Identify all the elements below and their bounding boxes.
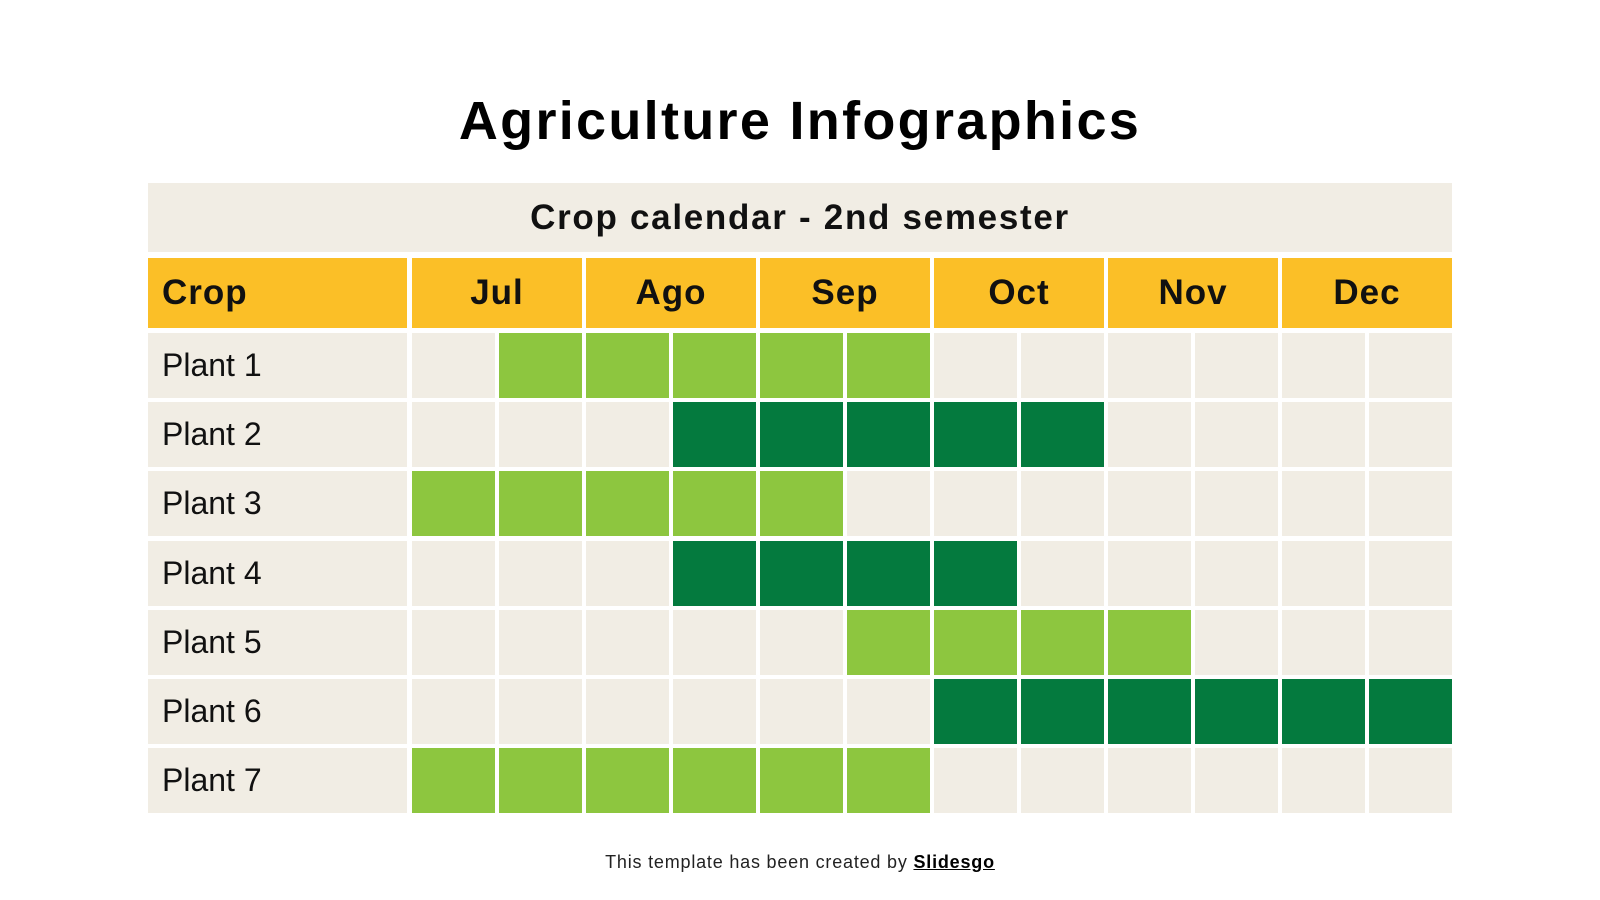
header: Nov xyxy=(1108,258,1278,328)
header: crop xyxy=(148,258,407,328)
row labels: Plant 2 xyxy=(162,416,262,452)
header: Sep xyxy=(760,258,930,328)
title: Agriculture Infographics xyxy=(459,91,1141,151)
header: Oct: Oct xyxy=(988,273,1050,312)
header: Jul: Jul xyxy=(470,273,524,312)
row labels: Plant 1 xyxy=(162,347,262,383)
row labels: Plant 4 xyxy=(162,555,262,591)
header: Jul xyxy=(412,258,582,328)
row labels: Plant 6 xyxy=(162,693,262,729)
row labels: Plant 7 xyxy=(162,762,262,798)
header: Ago xyxy=(586,258,756,328)
header: crop: Crop xyxy=(162,273,248,312)
header: Dec: Dec xyxy=(1333,273,1401,312)
header: Ago: Ago xyxy=(635,273,707,312)
header: Dec xyxy=(1282,258,1452,328)
subtitle header xyxy=(148,183,1452,252)
header: Nov: Nov xyxy=(1158,273,1228,312)
header: Oct xyxy=(934,258,1104,328)
header: Sep: Sep xyxy=(811,273,879,312)
row labels: Plant 3 xyxy=(162,485,262,521)
row labels: Plant 5 xyxy=(162,624,262,660)
row labels xyxy=(148,333,407,813)
subtitle header: Crop calendar - 2nd semester xyxy=(530,198,1070,236)
footer credit: This template has been created by Slidesgo xyxy=(605,852,995,872)
schedule grid xyxy=(412,333,1452,813)
